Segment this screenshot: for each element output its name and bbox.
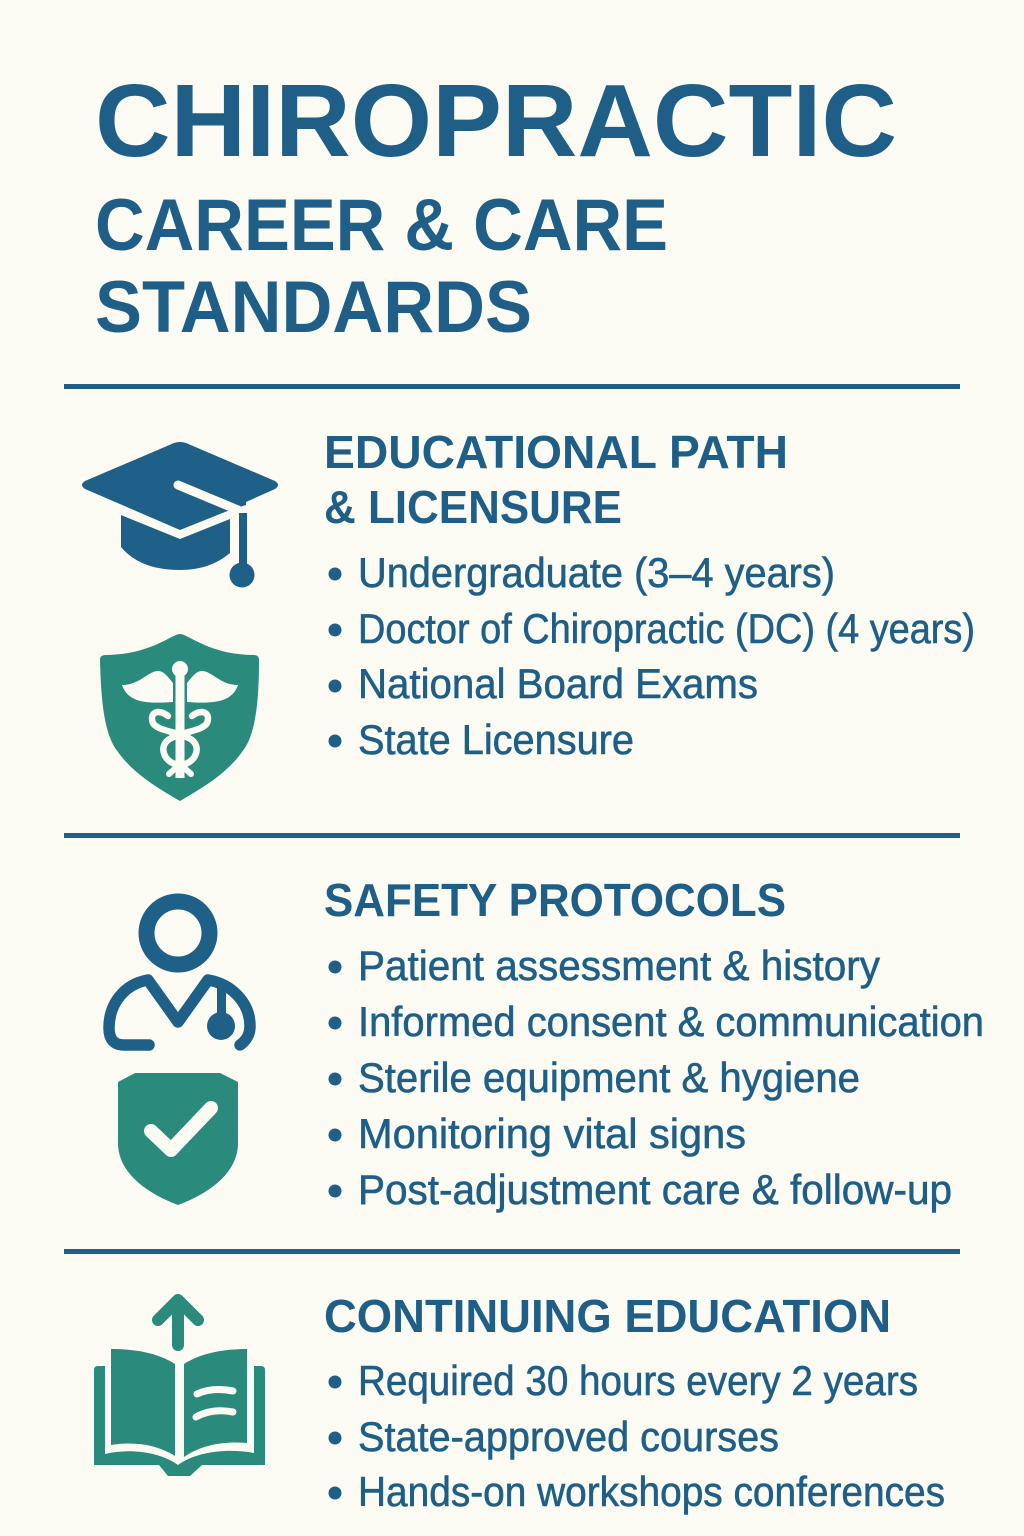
list: continuing education requirements	[328, 1357, 945, 1515]
panel: safety protocols	[109, 874, 984, 1213]
list: safety steps: Post-adjustment care & follow-up	[358, 1166, 952, 1213]
list: safety steps: Monitoring vital signs	[358, 1110, 746, 1157]
list: educational steps: State Licensure	[358, 716, 634, 763]
list: safety steps: Patient assessment & history	[358, 942, 880, 989]
icon: shield with check mark	[118, 1073, 238, 1205]
title	[95, 63, 897, 348]
icon: open book with up arrow	[94, 1300, 265, 1476]
heading: educational path	[324, 426, 788, 533]
title: CHIROPRACTIC	[95, 63, 897, 178]
heading: educational path: & LICENSURE	[324, 481, 622, 533]
list: educational steps: National Board Exams	[358, 660, 758, 707]
title: CAREER & CARE	[95, 185, 668, 266]
list: continuing education requirements: State-approved courses	[358, 1413, 779, 1460]
list: continuing education requirements: Required 30 hours every 2 years	[358, 1357, 918, 1404]
icon: graduation cap	[82, 442, 278, 588]
list: safety steps: Informed consent & communication	[358, 998, 984, 1045]
panel: continuing education	[94, 1290, 945, 1515]
heading: safety protocols: SAFETY PROTOCOLS	[324, 874, 786, 926]
list: educational steps: Undergraduate (3–4 years)	[358, 549, 835, 596]
list: educational steps: Doctor of Chiropractic (DC) (4 years)	[358, 605, 975, 652]
heading: educational path: EDUCATIONAL PATH	[324, 426, 788, 478]
list: safety steps: Sterile equipment & hygiene	[358, 1054, 860, 1101]
list: safety steps	[328, 942, 984, 1213]
heading: continuing education: CONTINUING EDUCATION	[324, 1290, 891, 1342]
icon: clinician with stethoscope	[109, 902, 250, 1045]
icon: medical shield with caduceus	[100, 634, 259, 801]
title: STANDARDS	[95, 267, 532, 348]
list: educational steps	[328, 549, 975, 763]
panel: educational path and licensure	[82, 426, 975, 801]
list: continuing education requirements: Hands-on workshops conferences	[358, 1468, 945, 1515]
